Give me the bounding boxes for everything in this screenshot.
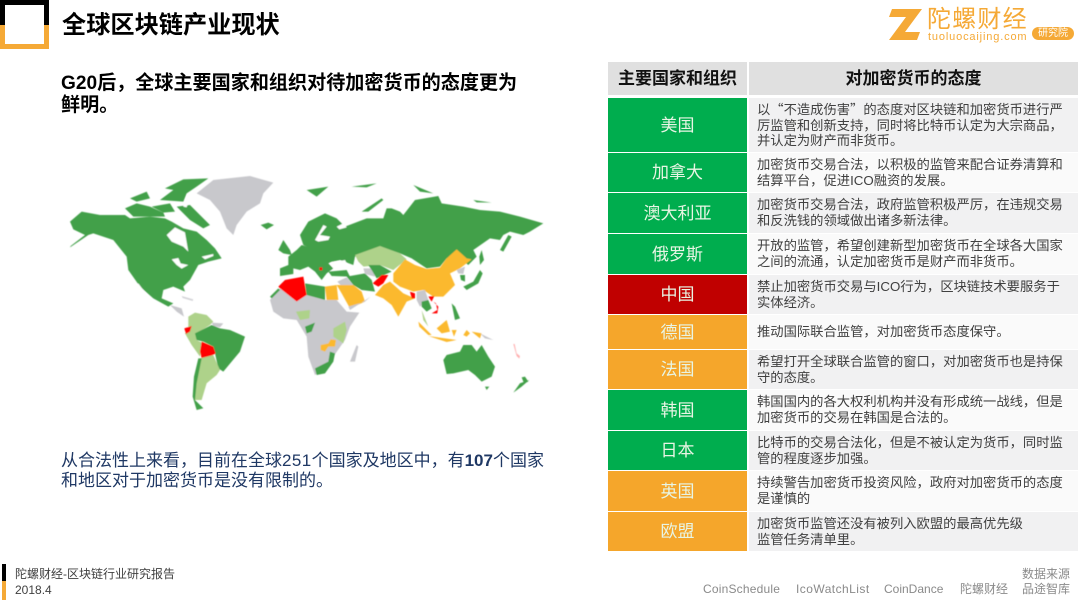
row: Canada [608,153,1063,192]
row: UK: 英国 [660,482,694,500]
footer report info: 陀螺财经-区块链行业研究报告 [15,567,175,581]
row: Canada: 结算平台，促进ICO融资的发展。 [757,172,954,188]
footer report info [15,567,175,596]
logo url: tuoluocaijing.com [928,31,1027,43]
logo [889,6,1074,43]
row: Japan [608,431,1078,470]
title: 全球区块链产业现状 [62,12,280,39]
row: USA: 厉监管和创新支持，同时将比特币认定为大宗商品， [757,118,1063,133]
row: China: 禁止加密货币交易与ICO行为，区块链技术要服务于 [757,279,1060,294]
row: Russia: 开放的监管，希望创建新型加密货币在全球各大国家 [757,238,1063,253]
row: UK [608,471,1063,511]
row: Korea: 韩国 [660,400,694,420]
subheading: G20后，全球主要国家和组织对待加密货币的态度更为 [61,73,517,94]
row: Japan: 日本 [660,441,694,460]
footer source: CoinDance: CoinDance [884,582,943,596]
row: China: 中国 [660,285,694,304]
table header: attitude [749,62,1078,95]
row: EU: 欧盟 [660,522,694,541]
footer source: Tuoluo: 陀螺财经 [960,582,1008,596]
row: China [608,275,1078,314]
subheading [61,72,517,116]
row: Russia: 俄罗斯 [652,244,703,264]
row: EU [608,512,1078,551]
row: Canada: 加密货币交易合法，以积极的监管来配合证券清算和 [757,157,1063,172]
row: Japan: 管的程度逐步加强。 [757,450,877,466]
table header: countries [608,62,747,95]
row: France: 守的态度。 [757,370,823,384]
row: Russia: 之间的流通，认定加密货币是财产而非货币。 [757,254,1023,269]
footer sources: CoinSchedule [703,582,780,596]
row: Germany: 德国 [660,322,694,342]
row: France [608,350,1078,389]
footer source: IcoWatchList: IcoWatchList [796,582,870,596]
corner bracket icon [0,0,49,49]
row: Japan: 比特币的交易合法化，但是不被认定为货币，同时监 [757,435,1063,450]
world map [70,176,544,411]
row: Korea: 加密货币的交易在韩国是合法的。 [757,410,956,425]
row: Australia [608,193,1078,233]
row: Russia [608,234,1063,274]
legality text block: 从合法性上来看，目前在全球251个国家及地区中，有107个国家 [61,451,544,470]
map: Americas [70,176,274,410]
row: Australia: 加密货币交易合法，政府监管积极严厉，在违规交易 [757,197,1063,212]
row: Australia: 和反洗钱的领域做出诸多新法律。 [757,213,956,228]
row: USA: 以“不造成伤害”的态度对区块链和加密货币进行严 [757,99,1063,118]
row: China: 实体经济。 [757,294,823,310]
footer source: Pintu: 品途智库 [1022,582,1070,596]
logo wordmark: 陀螺财经 [927,6,1028,33]
logo badge: 研究院 [1038,28,1068,39]
row: Germany [608,315,1010,349]
icon: Z mark [889,9,922,40]
row: Korea: 韩国国内的各大权利机构并没有形成统一战线，但是 [757,394,1063,409]
row: Germany: 推动国际联合监管，对加密货币态度保守。 [757,324,1010,339]
table header: attitude: 对加密货币的态度 [846,69,982,88]
table header: countries: 主要国家和组织 [618,69,737,88]
row: UK: 持续警告加密货币投资风险，政府对加密货币的态度 [757,475,1063,490]
row: Canada: 加拿大 [652,163,703,182]
map: Africa, Europe, Asia and Oceania [270,183,543,393]
row: EU: 监管任务清单里。 [757,532,863,546]
legality text block [61,451,544,490]
row: USA: 美国 [660,116,694,134]
subheading: 鲜明。 [61,95,118,116]
row: USA: 并认定为财产而非货币。 [757,133,903,148]
footer source: Pintu: 数据来源 [1022,567,1070,581]
footer accent bar [2,564,6,600]
row: France: 法国 [660,360,694,379]
footer report info: 2018.4 [15,582,52,596]
row: EU: 加密货币监管还没有被列入欧盟的最高优先级 [757,516,1023,531]
legality text block: 和地区对于加密货币是没有限制的。 [61,471,333,490]
footer source: Pintu [1022,567,1070,596]
logo badge [1032,27,1074,40]
row: Australia: 澳大利亚 [644,204,712,222]
row: France: 希望打开全球联合监管的窗口，对加密货币也是持保 [757,354,1063,369]
row: UK: 是谨慎的 [757,491,810,506]
row: Korea [608,390,1063,430]
row: USA [608,98,1078,152]
